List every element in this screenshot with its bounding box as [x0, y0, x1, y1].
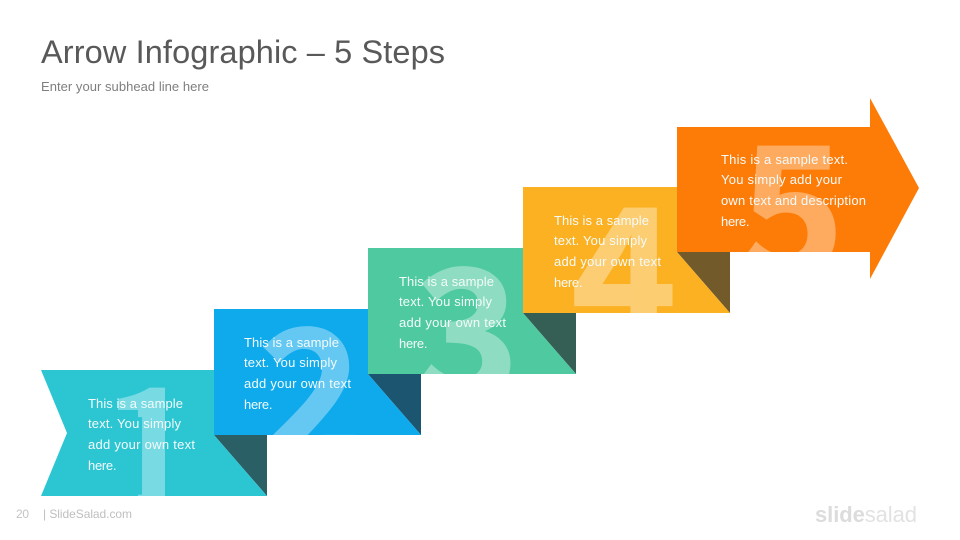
- number 4: 4: [571, 132, 677, 389]
- text 2: text. You simply: [244, 355, 338, 370]
- text 5: here.: [721, 214, 750, 229]
- text 4: text. You simply: [554, 233, 648, 248]
- fold shadow 2: [368, 374, 421, 435]
- step 3: green banner: [368, 248, 576, 374]
- step 2: blue banner: [214, 309, 421, 435]
- logo: slidesalad: [815, 502, 917, 527]
- text 4: here.: [554, 275, 582, 290]
- text 1: text. You simply: [88, 416, 182, 431]
- fold shadow 1: [214, 435, 267, 496]
- text 2: [244, 335, 351, 412]
- banner shape 1: [41, 370, 267, 496]
- text 3: text. You simply: [399, 294, 492, 309]
- text 1: This is a sample: [88, 396, 183, 411]
- text 1: here.: [88, 458, 116, 473]
- text 1: add your own text: [88, 437, 195, 452]
- step 1: teal notched banner: [41, 370, 267, 496]
- text 3: add your own text: [399, 315, 506, 330]
- text 2: add your own text: [244, 376, 351, 391]
- step 5: orange arrow: [677, 98, 919, 279]
- step 4: yellow banner: [523, 187, 730, 313]
- fold shadow 4: [677, 252, 730, 313]
- number 2: 2: [258, 253, 364, 510]
- text 5: own text and description: [721, 193, 866, 208]
- text 3: [399, 274, 506, 351]
- banner shape 2: [214, 309, 421, 435]
- banner shape 3: [368, 248, 576, 374]
- text 5: [721, 152, 866, 229]
- text 3: This is a sample: [399, 274, 494, 289]
- number 5: 5: [739, 70, 845, 327]
- number 3: 3: [414, 193, 520, 450]
- text 4: add your own text: [554, 254, 661, 269]
- arrow shape 5: [677, 98, 919, 279]
- footer source: | SlideSalad.com: [43, 507, 132, 521]
- text 2: here.: [244, 397, 272, 412]
- subhead: Enter your subhead line here: [41, 79, 209, 94]
- title: Arrow Infographic – 5 Steps: [41, 34, 445, 70]
- text 2: This is a sample: [244, 335, 339, 350]
- text 5: This is a sample text.: [721, 152, 848, 167]
- fold shadow 3: [523, 313, 576, 374]
- text 4: [554, 213, 661, 290]
- text 1: [88, 396, 195, 473]
- text 3: here.: [399, 336, 428, 351]
- page number: 20: [16, 507, 29, 521]
- text 5: You simply add your: [721, 172, 843, 187]
- banner shape 4: [523, 187, 730, 313]
- text 4: This is a sample: [554, 213, 649, 228]
